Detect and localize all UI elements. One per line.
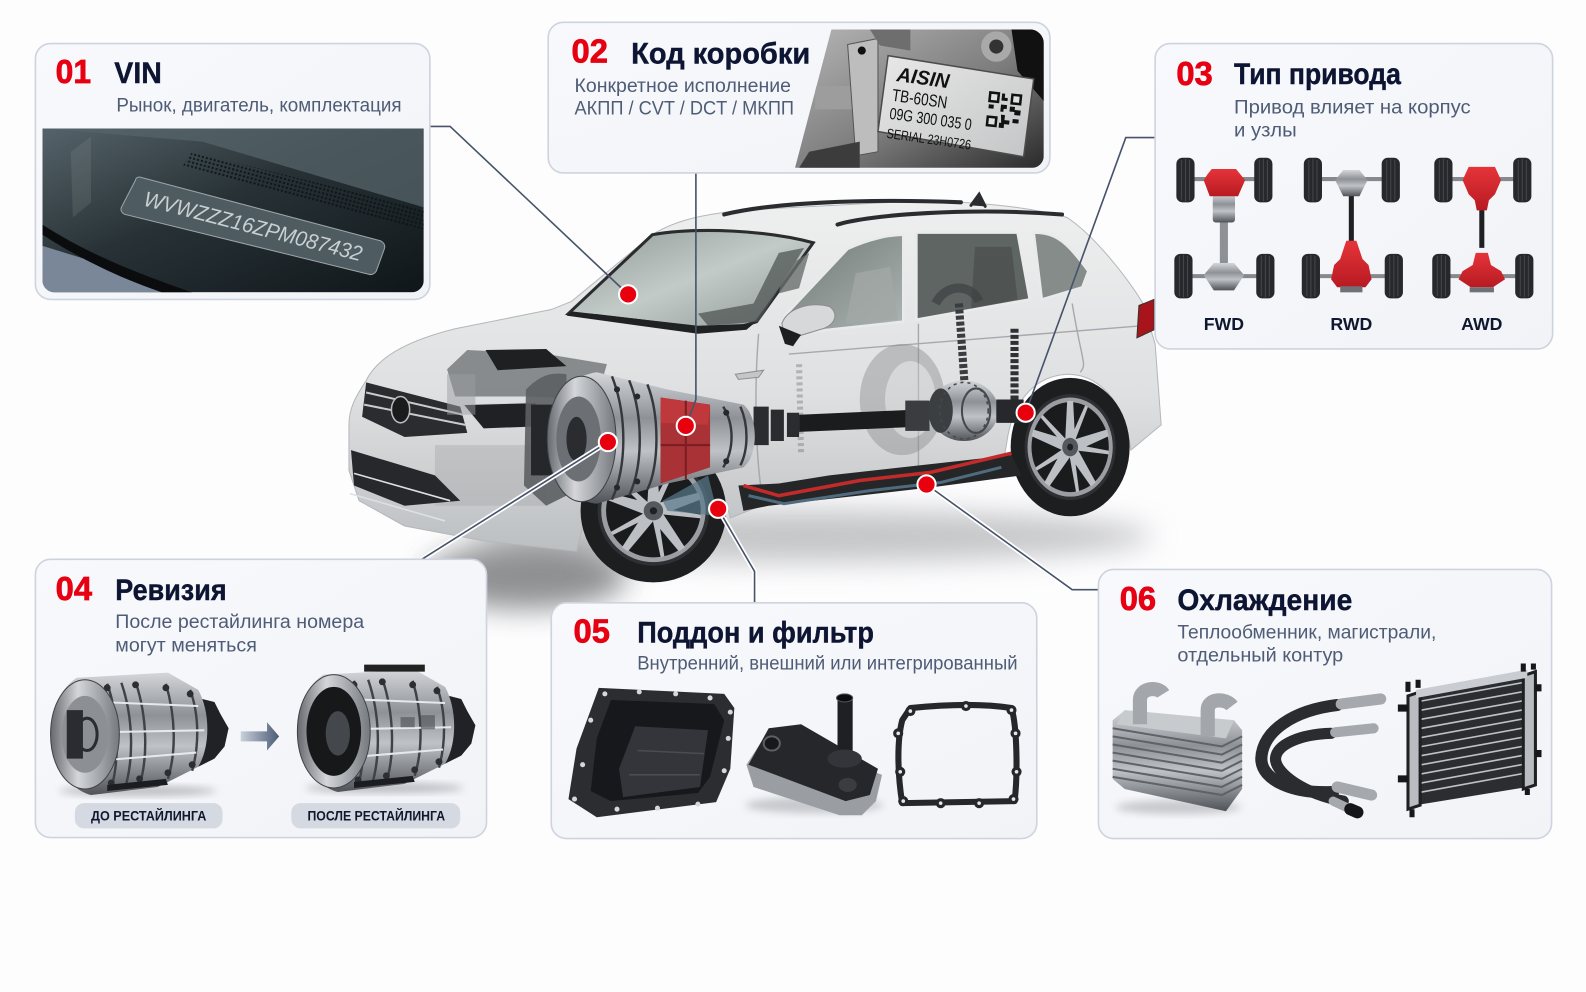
oil cooler [1113, 689, 1242, 814]
drive labels [1204, 314, 1503, 334]
rear differential [929, 380, 1024, 441]
description [1177, 622, 1436, 667]
caption after [291, 803, 460, 828]
propeller shaft [754, 401, 930, 445]
QR code [986, 91, 1022, 130]
underbody tray [738, 455, 1022, 511]
photo: gearbox label: SERIAL 23H0726 [886, 126, 972, 153]
number 03: 03 [1176, 56, 1213, 93]
red marker dots [599, 285, 1035, 518]
oil pan blue section [663, 475, 718, 516]
mirror [779, 305, 835, 346]
cooling lines [743, 453, 1011, 504]
heading: Код коробки [631, 38, 810, 71]
caption before [75, 803, 223, 828]
photo: gearbox label [795, 29, 1044, 168]
panel: 01 VIN [35, 44, 430, 299]
interior through windshield [698, 248, 804, 326]
door handle [735, 370, 764, 379]
halo of lower leaders [422, 442, 1072, 603]
description [115, 612, 364, 656]
windshield [568, 230, 813, 329]
description: Конкретное исполнение [575, 76, 791, 97]
line 03 [1026, 138, 1155, 413]
line 06 [927, 485, 1098, 590]
rear suspension [799, 288, 1015, 455]
description: АКПП / CVT / DCT / МКПП [575, 98, 794, 119]
diagram: FWD [1174, 158, 1274, 298]
tail light [1137, 299, 1154, 338]
panel: 02 gearbox code [548, 22, 1050, 173]
hoses [1261, 699, 1381, 812]
radiator [1398, 664, 1541, 817]
plate text: AISIN [895, 64, 951, 93]
description: Теплообменник, магистрали, [1177, 622, 1436, 643]
photo: windshield VIN plate [42, 128, 424, 292]
number 02: 02 [571, 34, 608, 71]
description: После рестайлинга номера [115, 612, 364, 633]
heading VIN: VIN [114, 57, 162, 90]
line 04 [422, 442, 608, 559]
car body [349, 201, 1161, 551]
side windows [785, 233, 1088, 332]
number 05: 05 [574, 613, 610, 650]
caption after: ПОСЛЕ РЕСТАЙЛИНГА [307, 808, 445, 823]
line 05 [718, 509, 755, 603]
diagram: RWD [1302, 158, 1403, 298]
drive labels: AWD [1461, 314, 1503, 334]
heading: Ревизия [115, 574, 227, 607]
ghost rear wheel [860, 344, 945, 455]
description: могут меняться [115, 635, 257, 656]
front grille [362, 382, 467, 437]
heading: Тип привода [1234, 58, 1402, 91]
transmission [524, 372, 755, 506]
VIN text: WVWZZZ16ZPM087432 [141, 187, 365, 266]
windshield base [566, 312, 754, 334]
panel: 03 drive type [1155, 44, 1553, 349]
number 04: 04 [56, 571, 92, 608]
roof rails and fin [724, 194, 1062, 225]
photo: gearbox label: 09G 300 035 0 [888, 105, 973, 134]
description: Привод влияет на корпус [1234, 97, 1471, 118]
number 01: 01 [56, 54, 91, 91]
number 06: 06 [1120, 581, 1156, 618]
filter [745, 694, 883, 815]
description [1234, 97, 1471, 142]
panel: 06 cooling [1098, 569, 1552, 839]
seats in windows [779, 247, 1018, 324]
door lines [756, 303, 1143, 486]
metal plate [878, 56, 1034, 157]
ghost front wheel interior [435, 445, 546, 506]
description: Рынок, двигатель, комплектация [116, 95, 402, 116]
panel: 04 revision [35, 559, 487, 838]
photo: gearbox label: TB-60SN [891, 85, 949, 112]
gearbox before [51, 673, 229, 796]
heading: Поддон и фильтр [637, 616, 874, 649]
caption before: ДО РЕСТАЙЛИНГА [91, 808, 206, 823]
drive labels: RWD [1330, 314, 1373, 334]
ground shadow [425, 510, 1153, 609]
line 02 [686, 173, 696, 426]
lower grille [350, 450, 460, 521]
rear wheel [1011, 378, 1130, 516]
leader lines [422, 126, 1155, 603]
gearbox after [297, 665, 475, 793]
gasket [893, 701, 1022, 808]
car cutaway illustration [349, 194, 1161, 582]
engine [447, 349, 607, 415]
VIN plate [121, 177, 385, 275]
description: отдельный контур [1177, 646, 1343, 667]
heading: Охлаждение [1177, 584, 1352, 617]
arrow [241, 722, 279, 751]
headlight [463, 403, 538, 429]
front wheel [581, 439, 726, 582]
line 01 [430, 126, 628, 294]
description [575, 76, 794, 119]
oil pan [568, 688, 734, 817]
drive labels: FWD [1204, 314, 1244, 334]
diagram: AWD [1432, 158, 1533, 298]
panel: 05 pan and filter [551, 603, 1037, 839]
description: Внутренний, внешний или интегрированный [637, 654, 1018, 675]
description: и узлы [1234, 121, 1297, 142]
